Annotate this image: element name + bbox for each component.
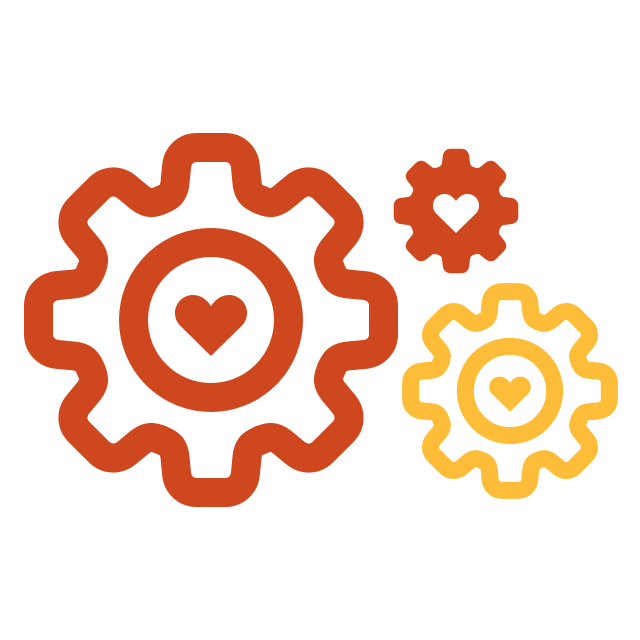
icon: large gear heart	[175, 295, 247, 356]
icon: small gear white heart	[433, 194, 479, 233]
yellow gear	[411, 292, 609, 490]
icon: yellow gear heart	[489, 377, 531, 412]
large red gear	[38, 148, 384, 492]
yellow gear inner ring	[465, 346, 555, 436]
large gear rim	[38, 148, 384, 492]
yellow gear rim	[411, 292, 609, 490]
small gear body and teeth	[394, 149, 518, 273]
small solid red gear	[394, 149, 518, 273]
large gear inner ring	[134, 242, 288, 398]
